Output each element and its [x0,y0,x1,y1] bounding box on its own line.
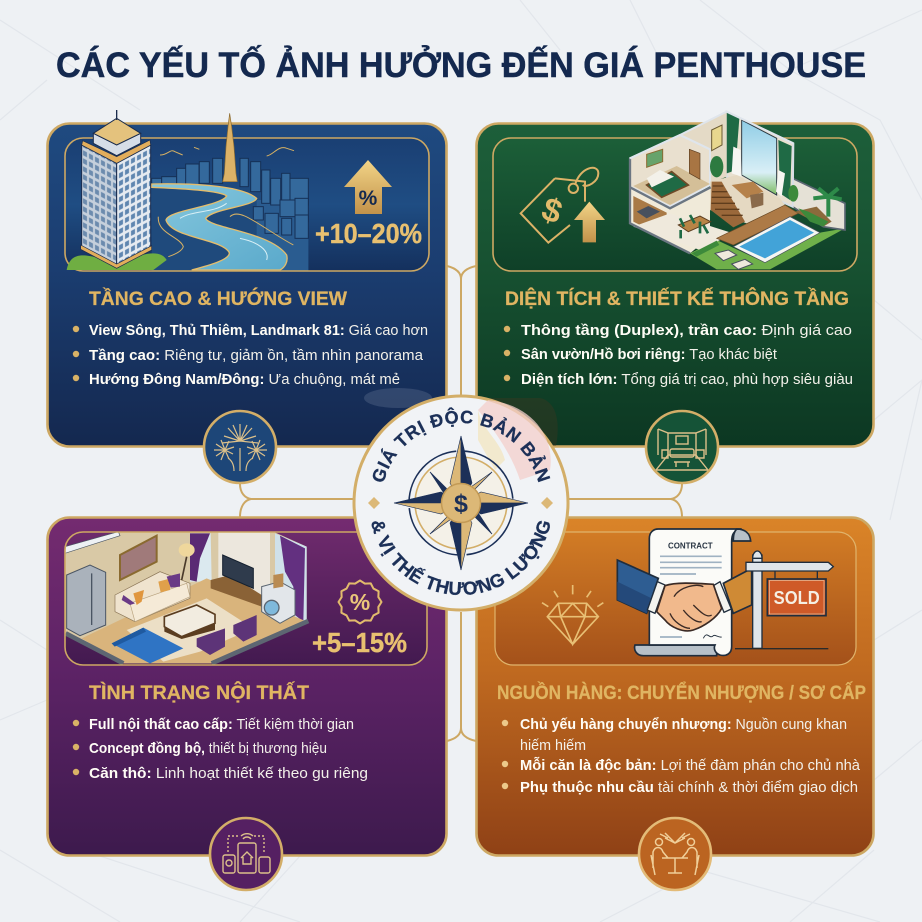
center seal: giá trị độc bản [352,394,570,612]
bullet list: hiếm hiếm [520,737,586,754]
bullet list: Sân vườn/Hồ bơi riêng: Tạo khác biệt [521,346,778,363]
bullet list: Tầng cao: Riêng tư, giảm ồn, tầm nhìn panorama [89,347,424,364]
icon: compass star: $ [454,490,468,518]
icon: percent up arrow [344,160,392,214]
bullet list: Căn thô: Linh hoạt thiết kế theo gu riêng [89,765,368,782]
heading: TÌNH TRẠNG NỘI THẤT [89,680,309,704]
icon: price tag with arrow [521,168,605,243]
bullet list: Full nội thất cao cấp: Tiết kiệm thời gian [89,716,354,733]
diamond markers [368,497,553,509]
illustration: contract handshake and sold sign: SOLD [774,587,820,608]
bullet list [504,322,853,388]
bullet list: Phụ thuộc nhu cầu tài chính & thời điểm giao dịch [520,779,858,796]
illustration: contract handshake and sold sign: CONTRACT [668,541,713,551]
bullet list: Chủ yếu hàng chuyển nhượng: Nguồn cung khan [520,716,847,733]
bullet list: Concept đồng bộ, thiết bị thương hiệu [89,740,327,757]
bullet list: Thông tầng (Duplex), trần cao: Định giá cao [521,322,852,339]
icon: high-rise building [67,110,167,270]
stat: +10–20%: +10–20% [315,218,422,249]
seal text bottom: & VỊ THẾ THƯƠNG LƯỢNG [372,520,550,596]
heading: DIỆN TÍCH & THIẾT KẾ THÔNG TẦNG [505,286,849,310]
image frame [493,138,857,271]
seal text top: GIÁ TRỊ ĐỘC BẢN BẢN [372,407,550,482]
image frame: furnished living room [65,532,427,665]
watermark tints on panels [364,388,558,446]
bullet list: Hướng Đông Nam/Đông: Ưa chuộng, mát mẻ [89,371,400,388]
icon: percent badge: % [350,589,370,615]
icon: price tag with arrow: $ [537,191,567,232]
panel: diện tích & thiết kế thông tầng [476,112,874,483]
image frame [495,532,856,665]
panel: tình trạng nội thất [48,518,446,890]
icon: room badge [646,411,718,483]
panel: nguồn hàng [476,518,874,890]
bullet list [73,716,368,782]
stat: +5–15%: +5–15% [312,627,407,658]
gold connector lines [240,266,682,741]
bullet list [73,322,428,388]
bullet list: Diện tích lớn: Tổng giá trị cao, phù hợp siêu giàu [521,371,853,388]
icon: burj tower [223,113,237,182]
illustration: contract handshake and sold sign [617,529,833,656]
image frame: city river view [65,110,429,483]
icon: negotiation badge [639,818,711,890]
icon: duplex house cutaway [630,112,845,269]
bullet list: View Sông, Thủ Thiêm, Landmark 81: Giá cao hơn [89,322,428,339]
bullet list [502,716,861,796]
panel: tầng cao & hướng view [46,110,875,892]
heading: TẦNG CAO & HƯỚNG VIEW [89,286,348,310]
icon: diamond [542,585,603,644]
title: CÁC YẾU TỐ ẢNH HƯỞNG ĐẾN GIÁ PENTHOUSE [56,45,866,85]
icon: smart home badge [210,818,282,890]
bullet list: Mỗi căn là độc bản: Lợi thế đàm phán cho chủ nhà [520,757,861,774]
icon: percent badge [338,580,382,624]
icon: percent up arrow: % [359,187,378,210]
heading: NGUỒN HÀNG: CHUYỂN NHƯỢNG / SƠ CẤP [497,680,866,704]
icon: fireworks badge [204,411,276,483]
icon: compass star [394,436,528,570]
